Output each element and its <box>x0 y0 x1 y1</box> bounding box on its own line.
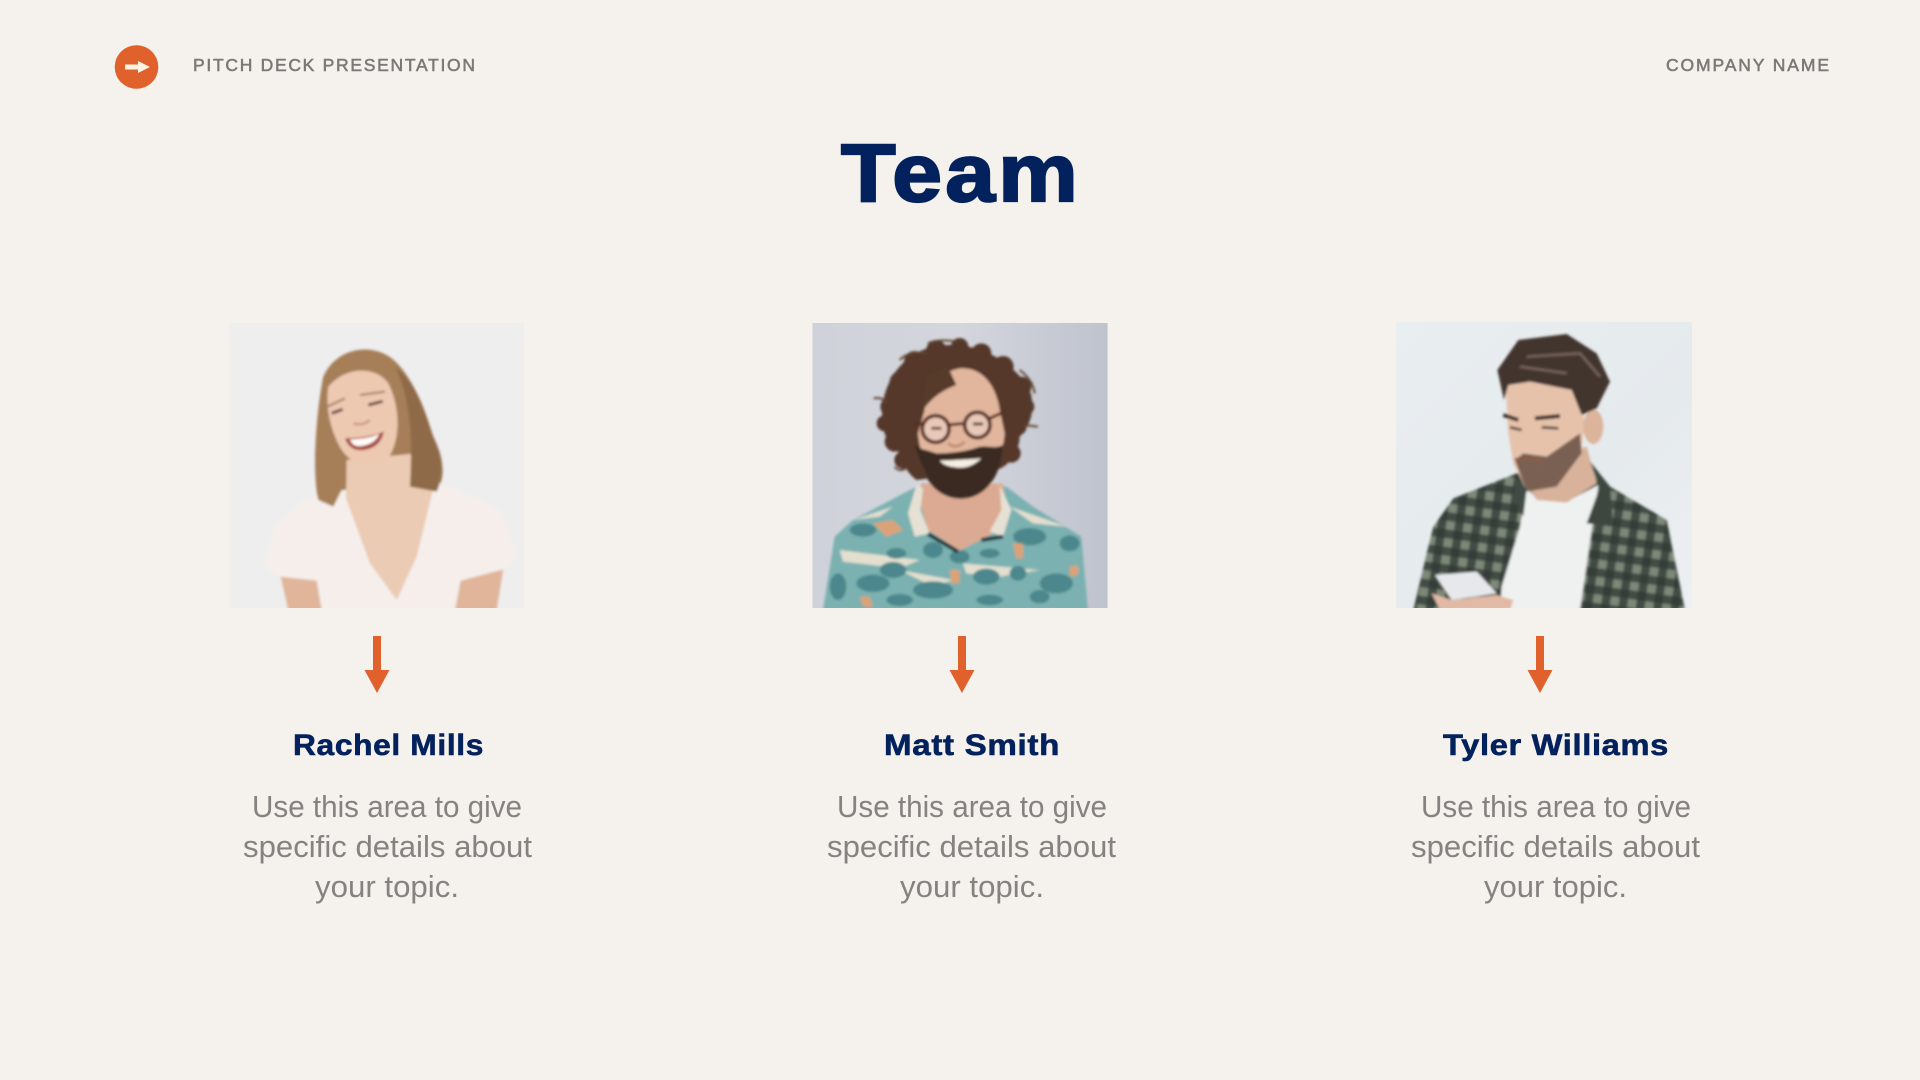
photo: Matt Smith <box>812 323 1108 608</box>
description <box>1411 789 1700 904</box>
description: Use this area to give <box>1421 789 1691 824</box>
description: Use this area to give <box>252 789 522 824</box>
description: Use this area to give <box>837 789 1107 824</box>
title: Team <box>841 128 1081 219</box>
team member: Tyler Williams <box>1396 322 1700 904</box>
arrow down <box>364 636 390 693</box>
name: Rachel Mills <box>293 729 484 762</box>
description: your topic. <box>315 869 459 904</box>
arrow down <box>950 636 974 693</box>
photo: Rachel Mills <box>280 347 504 608</box>
name: Matt Smith <box>884 729 1060 762</box>
description: your topic. <box>900 869 1044 904</box>
arrow down <box>1528 636 1552 693</box>
team member: Rachel Mills <box>229 323 532 904</box>
icon: arrow badge <box>115 45 158 89</box>
description: your topic. <box>1484 869 1627 904</box>
description <box>827 789 1116 904</box>
header label: company name: COMPANY NAME <box>1666 55 1829 75</box>
description <box>243 789 532 904</box>
description: specific details about <box>1411 829 1700 864</box>
photo: Tyler Williams <box>1396 322 1692 608</box>
name: Tyler Williams <box>1443 729 1669 762</box>
header label: pitch deck presentation: PITCH DECK PRESENTATION <box>193 55 475 75</box>
description: specific details about <box>243 829 532 864</box>
team member: Matt Smith <box>812 323 1116 904</box>
description: specific details about <box>827 829 1116 864</box>
